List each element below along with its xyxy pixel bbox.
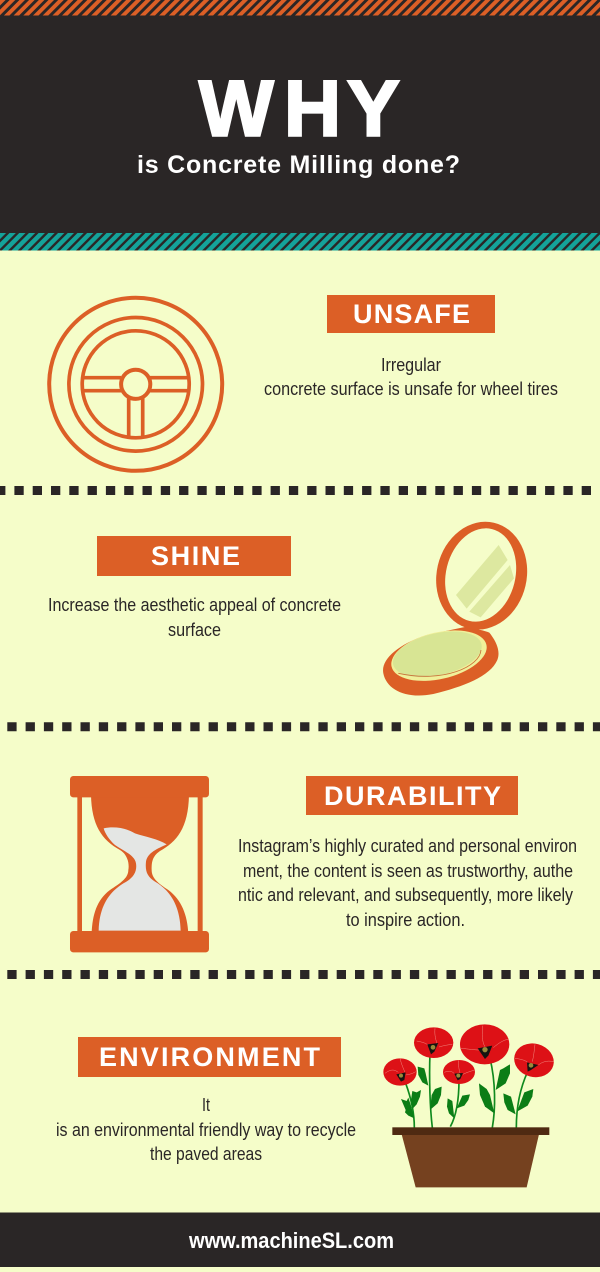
text: shine — [48, 595, 341, 640]
teal hazard stripe — [0, 233, 600, 250]
panel: unsafe — [264, 295, 558, 399]
text: environment — [56, 1095, 356, 1164]
text: unsafe — [264, 355, 558, 399]
icon: steering wheel — [49, 298, 222, 471]
text: shine: surface — [168, 620, 221, 640]
icon: hourglass — [70, 776, 209, 952]
heading: unsafe — [327, 295, 495, 333]
heading: environment — [78, 1037, 341, 1077]
heading: shine: SHINE — [151, 541, 240, 571]
divider 1 — [0, 486, 600, 495]
text: unsafe: Irregular — [381, 355, 441, 375]
footer — [0, 1212, 600, 1267]
text: environment: It — [202, 1095, 210, 1115]
text: environment: the paved areas — [150, 1144, 262, 1164]
subtitle: is Concrete Milling done? — [137, 151, 460, 179]
divider 3 — [0, 970, 600, 979]
poppy flowers — [383, 1024, 558, 1086]
orange hazard stripe — [0, 0, 600, 16]
divider 2 — [0, 722, 600, 731]
title: WHY — [199, 63, 400, 152]
heading: shine — [97, 536, 291, 576]
text: durability: to inspire action. — [346, 910, 465, 930]
text: shine: Increase the aesthetic appeal of concrete — [48, 595, 341, 615]
panel: durability — [238, 776, 577, 930]
panel: shine — [48, 536, 341, 640]
icon: potted poppies — [383, 1024, 558, 1187]
footer url: www.machineSL.com — [188, 1228, 394, 1253]
heading: environment: ENVIRONMENT — [99, 1042, 320, 1072]
heading: unsafe: UNSAFE — [353, 299, 470, 329]
header band — [0, 0, 600, 250]
text: unsafe: concrete surface is unsafe for wheel tires — [264, 379, 558, 399]
icon: compact mirror — [383, 513, 538, 695]
text: durability — [238, 836, 577, 930]
heading: durability — [306, 776, 518, 815]
heading: durability: DURABILITY — [324, 781, 501, 811]
text: environment: is an environmental friendly way to recycle — [56, 1120, 356, 1140]
panel: environment — [56, 1037, 356, 1164]
